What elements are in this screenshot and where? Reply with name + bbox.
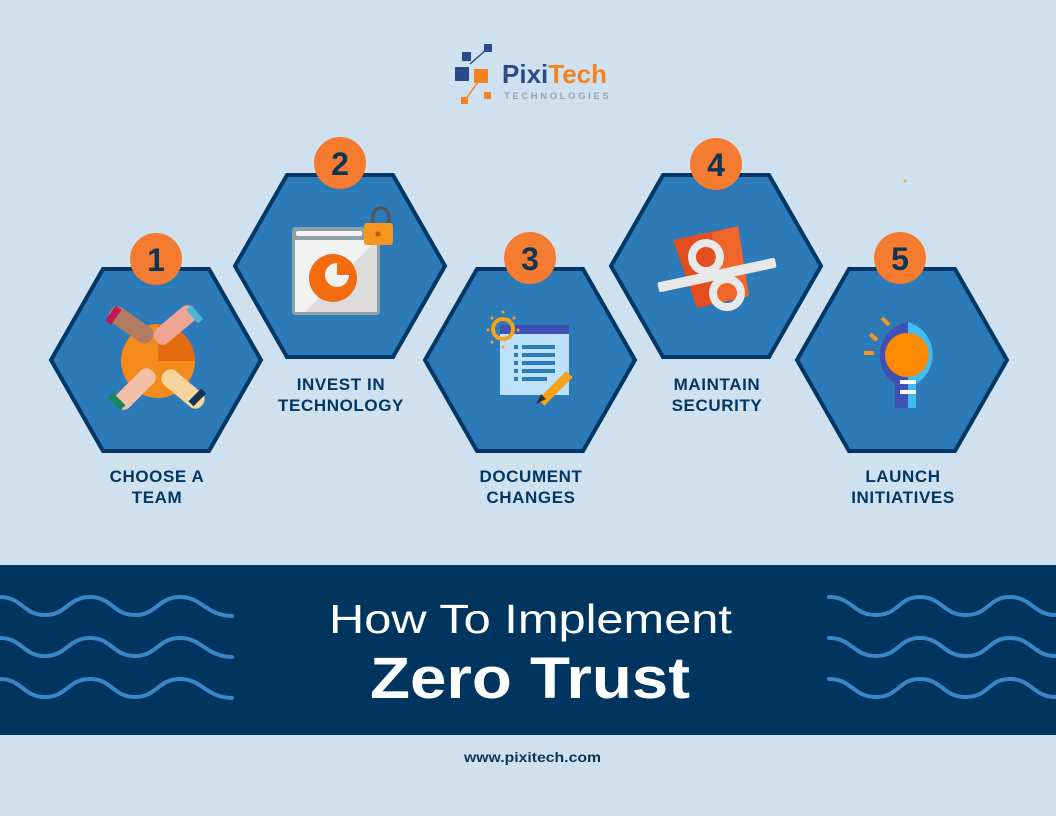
number badge 2 [314, 137, 366, 189]
label: MAINTAIN [674, 375, 760, 394]
number badge 4 [690, 138, 742, 190]
label: CHANGES [486, 488, 576, 507]
number badge 1 [130, 233, 182, 285]
step 1: choose a team [51, 233, 261, 507]
label: TEAM [132, 488, 182, 507]
icon: document [486, 310, 573, 406]
title banner [0, 565, 1056, 735]
label: LAUNCH [865, 467, 941, 486]
number badge 1: 1 [147, 242, 165, 278]
label: INVEST IN [297, 375, 385, 394]
icon: light bulb [864, 318, 933, 408]
title text: How To Implement [329, 596, 733, 642]
number badge 2: 2 [331, 146, 349, 182]
number badge 3 [504, 232, 556, 284]
icon: browser lock [292, 208, 393, 315]
number badge 5: 5 [891, 241, 909, 277]
logo: TECHNOLOGIES [504, 91, 611, 102]
logo [455, 44, 611, 104]
step 5: launch initiatives [797, 232, 1007, 507]
icon: wrench shield [657, 226, 777, 308]
label: TECHNOLOGY [278, 396, 404, 415]
number badge 3: 3 [521, 241, 539, 277]
step 4: maintain security [611, 138, 821, 415]
label: CHOOSE A [110, 467, 204, 486]
title banner: Zero Trust [370, 646, 690, 711]
decorative dot [904, 180, 906, 182]
step 3: document changes [425, 232, 635, 507]
icon: hands [105, 302, 208, 413]
number badge 4: 4 [707, 147, 725, 183]
number badge 5 [874, 232, 926, 284]
logo: PixiTech [502, 59, 607, 89]
label: DOCUMENT [479, 467, 583, 486]
footer url: www.pixitech.com [463, 749, 601, 765]
label: SECURITY [672, 396, 762, 415]
label: INITIATIVES [851, 488, 955, 507]
step 2: invest in technology [235, 137, 445, 415]
